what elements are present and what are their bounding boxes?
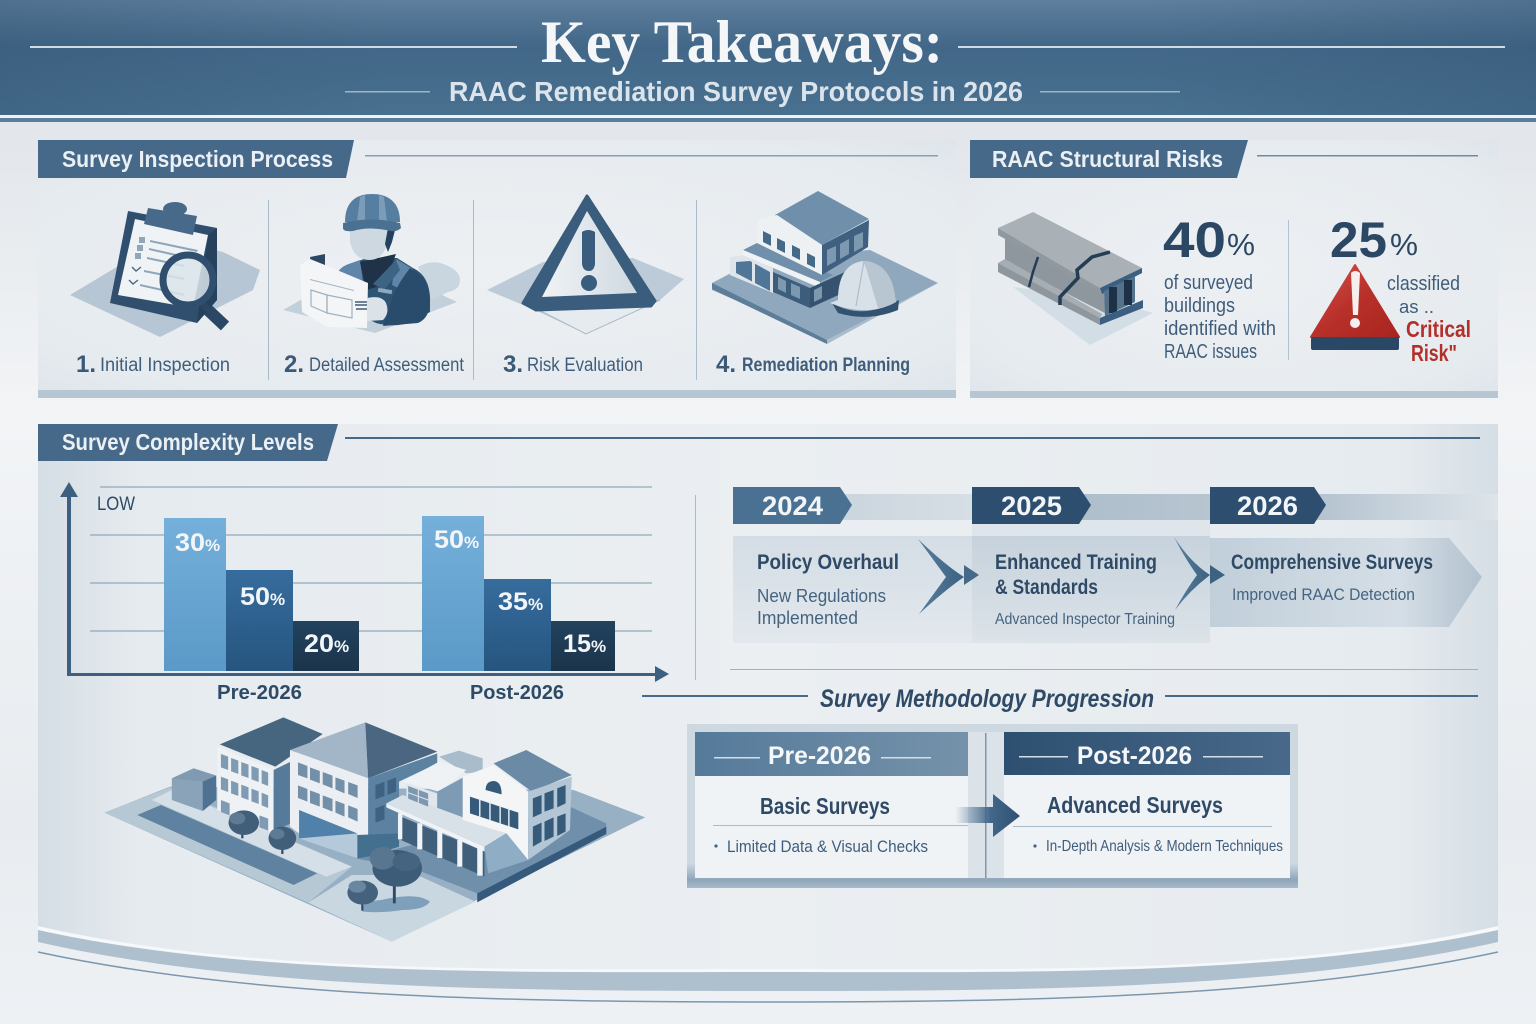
bar chart: 20 xyxy=(304,630,334,658)
step label 4: Remediation Planning xyxy=(742,355,910,376)
step label 3: 3. xyxy=(503,351,523,378)
timeline card 2025 xyxy=(972,487,1210,643)
stat: 25 percent xyxy=(1330,212,1418,268)
timeline card 2025: 2025 xyxy=(1001,491,1062,521)
bar chart: % xyxy=(270,590,285,609)
step label 3: Risk Evaluation xyxy=(527,355,643,376)
timeline xyxy=(733,487,1498,643)
heading: RAAC structural risks: RAAC Structural Risks xyxy=(992,146,1223,172)
arrow: 2025 to 2026 xyxy=(1174,537,1225,610)
heading: survey inspection process: Survey Inspection Process xyxy=(62,146,333,172)
bar chart: % xyxy=(464,533,479,552)
stat: 40 percent: identified with xyxy=(1164,318,1276,340)
timeline card 2024: Policy Overhaul xyxy=(757,551,899,574)
illustration: isometric buildings xyxy=(105,717,645,942)
panel: survey inspection process xyxy=(38,140,956,398)
bar chart: % xyxy=(334,637,349,656)
bar chart: 30 xyxy=(175,529,205,557)
subtitle: RAAC Remediation Survey Protocols in 2026 xyxy=(449,76,1023,107)
heading: RAAC structural risks xyxy=(970,140,1248,178)
heading: survey methodology progression: Survey Methodology Progression xyxy=(820,685,1154,713)
timeline card 2026: Comprehensive Surveys xyxy=(1231,551,1433,574)
heading: survey inspection process xyxy=(38,140,354,178)
critical risk text: Critical xyxy=(1406,316,1471,342)
timeline card 2025: & Standards xyxy=(995,576,1098,599)
timeline card 2025: Enhanced Training xyxy=(995,551,1157,574)
bar chart: 15 xyxy=(563,630,591,658)
card: post-2026 xyxy=(1004,732,1290,878)
step label 4 xyxy=(716,351,910,378)
panel: survey complexity levels xyxy=(38,424,1498,972)
decorative footer curves xyxy=(38,926,1498,1002)
header banner xyxy=(0,0,1536,122)
critical risk text xyxy=(1387,273,1471,366)
stat: 40 percent: % xyxy=(1227,227,1255,262)
card: pre-2026: Pre-2026 xyxy=(768,742,871,770)
card: post-2026: Post-2026 xyxy=(1077,742,1192,770)
stat: 40 percent: of surveyed xyxy=(1164,272,1253,294)
timeline card 2024 xyxy=(733,487,972,643)
bar chart: 35 xyxy=(498,588,528,616)
card: pre-2026: Basic Surveys xyxy=(760,793,890,819)
bar chart: Pre-2026 xyxy=(217,682,302,704)
step label 1 xyxy=(76,351,230,378)
timeline card 2025: Advanced Inspector Training xyxy=(995,611,1175,628)
timeline card 2026: 2026 xyxy=(1237,491,1298,521)
bar chart: 50 xyxy=(434,526,464,554)
critical risk text: classified xyxy=(1387,273,1460,295)
icon: warning triangle xyxy=(487,196,684,334)
icon: cracked RAAC beam xyxy=(998,212,1153,345)
timeline card 2024: Implemented xyxy=(757,608,858,628)
critical risk text: Risk" xyxy=(1411,340,1457,366)
step label 2: 2. xyxy=(284,351,304,378)
title: Key Takeaways: xyxy=(541,9,943,75)
comparison: pre versus post 2026 xyxy=(687,724,1298,888)
critical risk text: as .. xyxy=(1399,297,1434,317)
arrow: pre to post xyxy=(955,794,1020,837)
step label 2 xyxy=(284,351,465,378)
timeline card 2026: Improved RAAC Detection xyxy=(1232,585,1415,604)
panel: RAAC structural risks xyxy=(970,140,1498,398)
icon: clipboard with magnifier xyxy=(70,202,260,337)
timeline card 2026 xyxy=(1210,487,1482,627)
step label 1: 1. xyxy=(76,351,96,378)
stat: 25 percent: 25 xyxy=(1330,212,1387,268)
card: pre-2026 xyxy=(695,732,968,878)
arrow: 2024 to 2025 xyxy=(918,539,979,614)
heading: survey complexity levels xyxy=(38,424,338,461)
icon: red warning triangle xyxy=(1311,265,1399,350)
bar chart: % xyxy=(205,536,220,555)
heading: survey complexity levels: Survey Complexity Levels xyxy=(62,429,314,455)
timeline card 2024: New Regulations xyxy=(757,586,886,606)
card: post-2026: Advanced Surveys xyxy=(1047,792,1223,818)
step label 4: 4. xyxy=(716,351,736,378)
step label 3 xyxy=(503,351,643,378)
stat: 40 percent: 40 xyxy=(1163,212,1226,268)
bar chart xyxy=(60,482,669,704)
step label 2: Detailed Assessment xyxy=(309,355,465,376)
card: pre-2026: Limited Data & Visual Checks xyxy=(727,837,928,856)
card: post-2026: In-Depth Analysis & Modern Techniques xyxy=(1046,838,1283,855)
bar chart: LOW xyxy=(97,494,135,515)
stat: 40 percent: RAAC issues xyxy=(1164,341,1257,363)
bar chart: % xyxy=(528,595,543,614)
icon: inspector with blueprint xyxy=(283,194,460,333)
stat: 40 percent: buildings xyxy=(1164,295,1235,317)
bar chart: Post-2026 xyxy=(470,682,564,704)
stat: 40 percent xyxy=(1163,212,1276,363)
timeline card 2024: 2024 xyxy=(762,491,823,521)
stat: 25 percent: % xyxy=(1390,227,1418,262)
step label 1: Initial Inspection xyxy=(100,355,230,376)
bar chart: 50 xyxy=(240,583,270,611)
icon: building with hard hat xyxy=(712,191,938,344)
bar chart: % xyxy=(591,637,606,656)
